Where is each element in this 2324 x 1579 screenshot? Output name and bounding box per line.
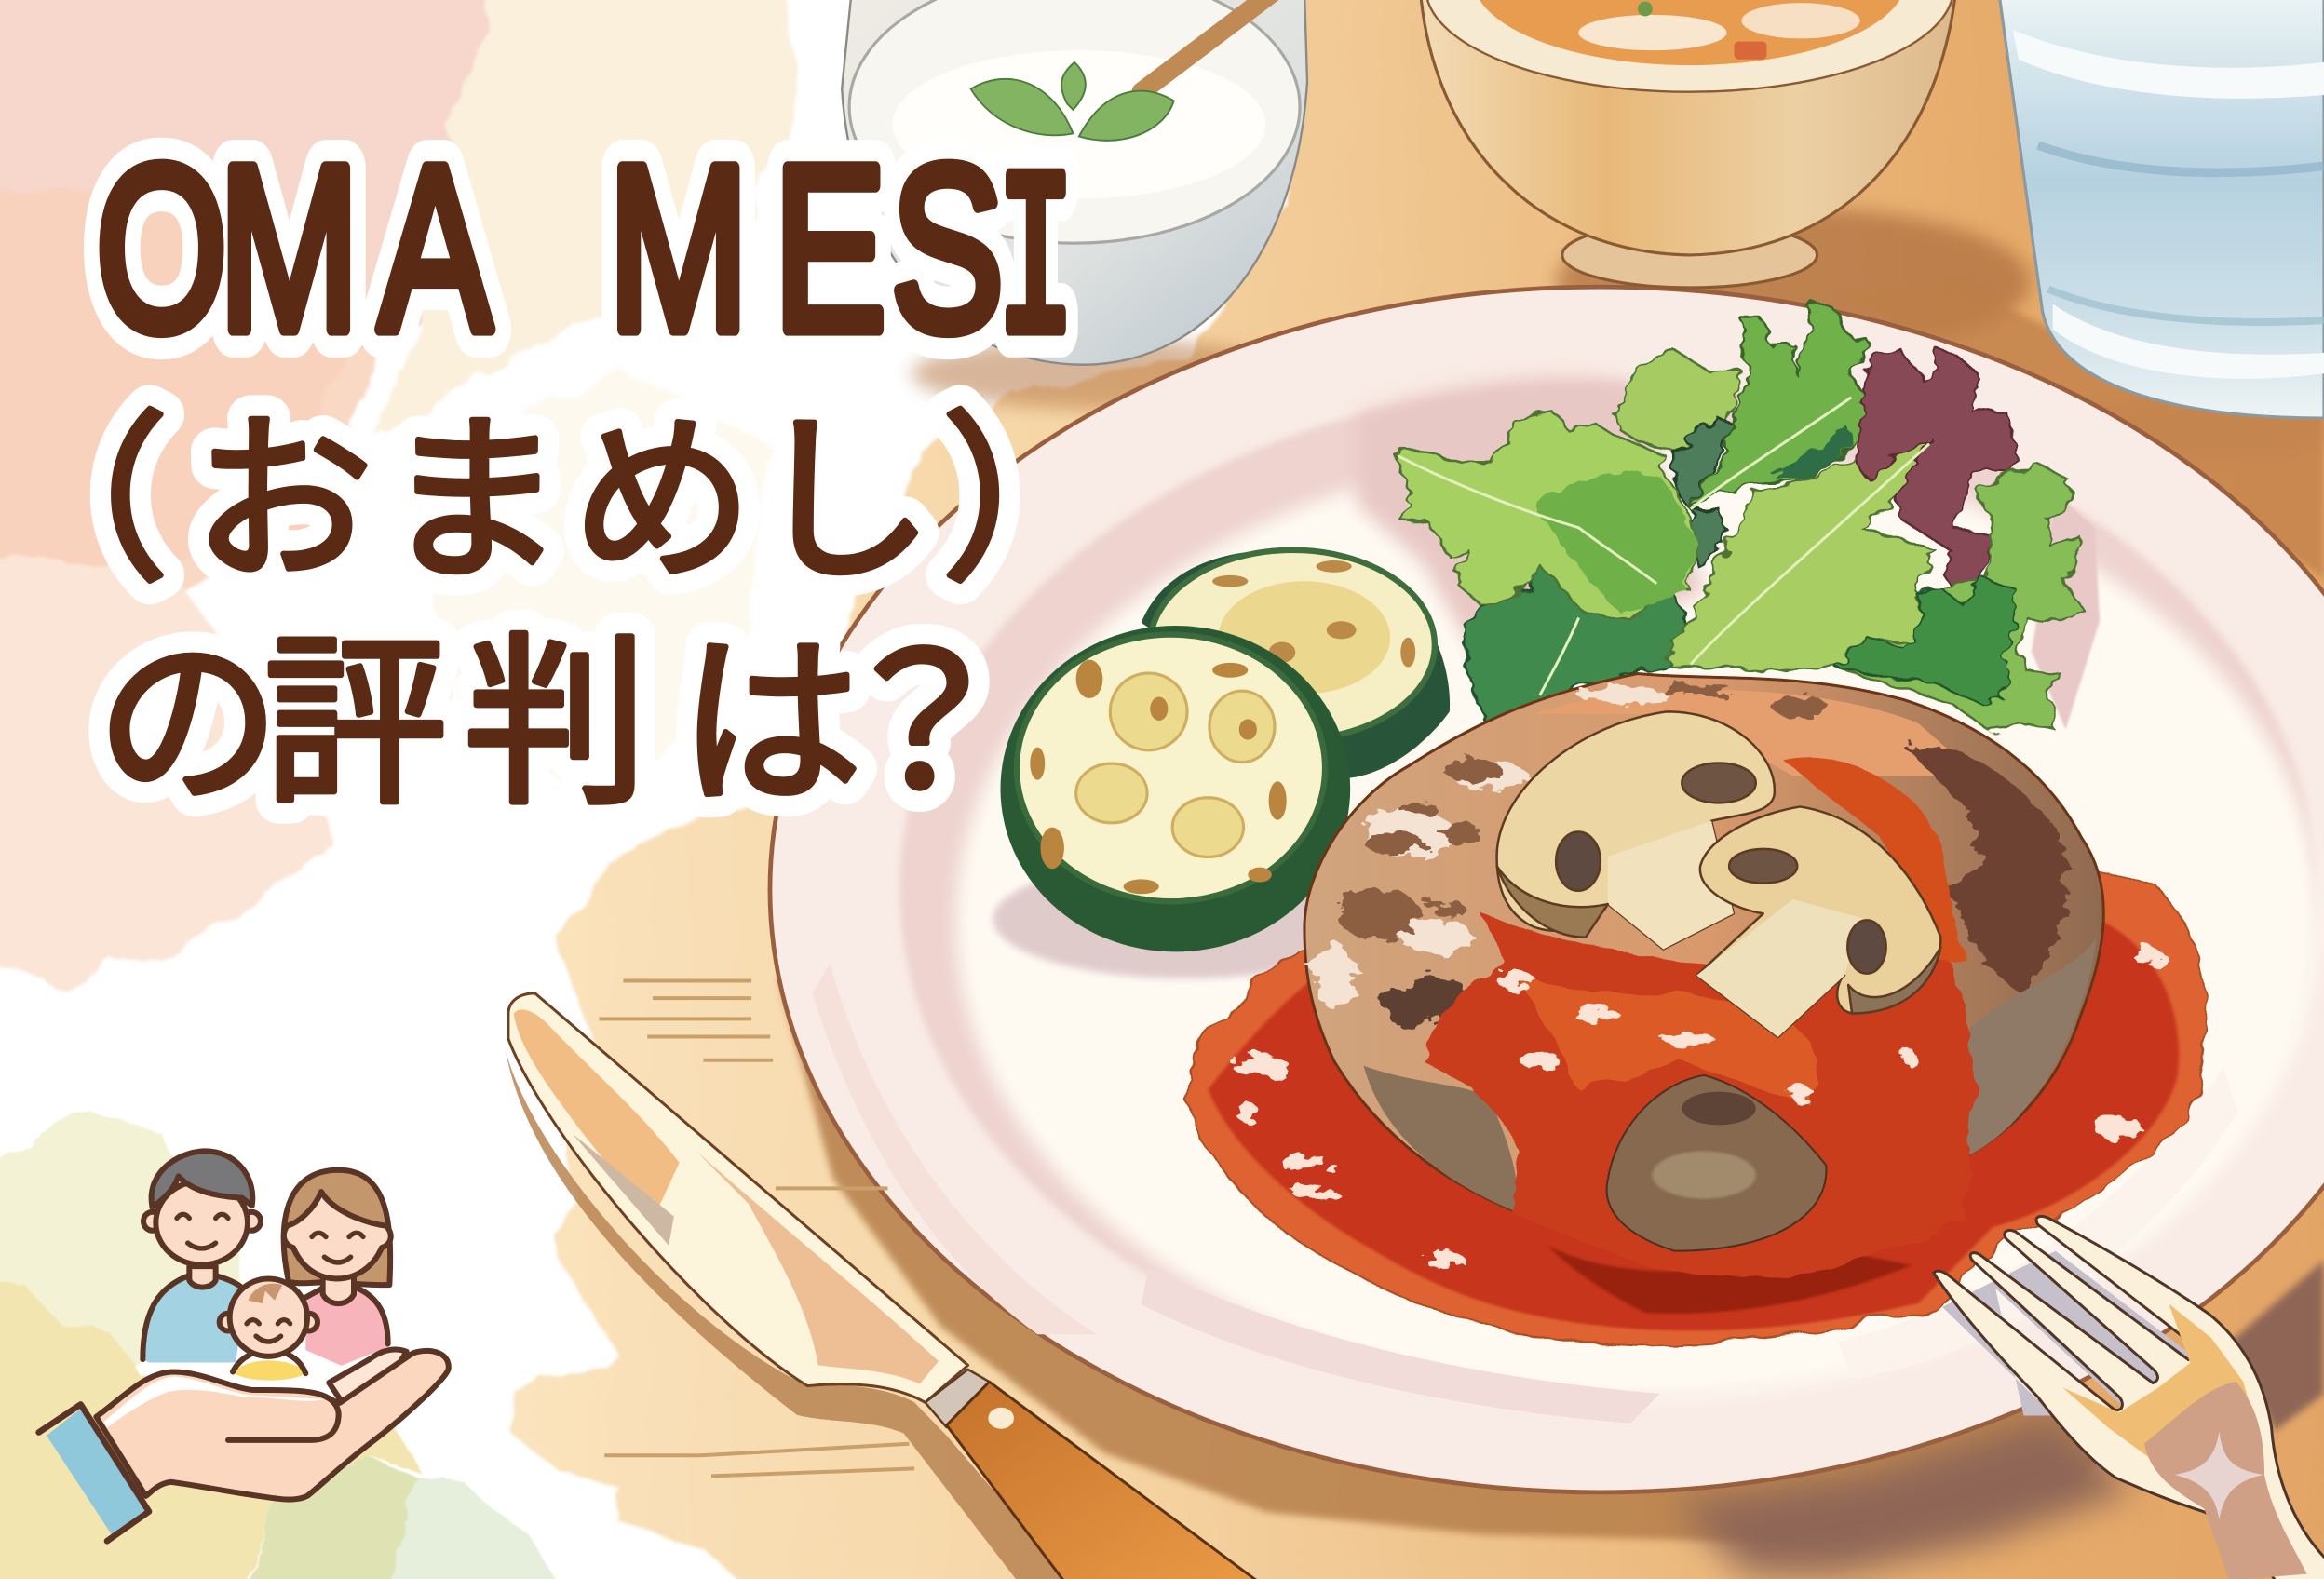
knife shadow [506, 1051, 1070, 1579]
icon: mint leaves [971, 62, 1174, 141]
knife [506, 981, 1267, 1579]
leaf: dark strip [1676, 416, 1735, 568]
tomato sauce [1186, 870, 2206, 1346]
icon: sparkle [2174, 1431, 2263, 1519]
zucchini: front slice [1000, 626, 1350, 951]
zucchini slices [1000, 550, 1450, 951]
steak speckles left [1313, 683, 1827, 1028]
title line 1: OMA MES [96, 118, 1004, 379]
shirt cuff [39, 1404, 149, 1541]
title line 1: I [996, 135, 1075, 400]
plate shadow through fork [1942, 1251, 2194, 1416]
zucchini: back slice [1142, 550, 1450, 778]
wood table [513, 0, 2324, 1579]
leaf: top light [1617, 347, 1739, 453]
plate shadow beside zucchini [993, 860, 1378, 978]
plate shadow behind lettuce [1357, 377, 1705, 668]
title line 2: （おまめし） [0, 400, 1122, 602]
bottom left wash [0, 1111, 568, 1579]
knife blade [508, 993, 968, 1402]
wood grain strokes [600, 981, 914, 1476]
hand [96, 1350, 449, 1500]
icon: spoon [1142, 0, 1275, 92]
title line 1: I [996, 135, 1075, 400]
yogurt bowl [842, 0, 1307, 365]
icon: family held in hand [0, 1111, 568, 1579]
lettuce [1394, 301, 2100, 730]
father [142, 1151, 261, 1362]
leaf veins [1398, 398, 1929, 695]
title line 3: の評判は？ [96, 621, 1014, 827]
leaf: center big [1667, 440, 1934, 670]
title line 3: の評判は？ [96, 621, 1014, 827]
sauce highlights [1234, 947, 2161, 1270]
leaf: right [1837, 463, 2085, 730]
title [0, 118, 1122, 827]
title line 2: （おまめし） [0, 400, 1122, 602]
table shadows [778, 208, 2324, 1574]
plate [768, 285, 2324, 1494]
leaf: purple [1857, 349, 2020, 608]
knife bolster [926, 1370, 990, 1427]
leaf: top centre [1691, 301, 1871, 509]
exposed meat lump [1607, 1075, 1826, 1251]
fork body [1934, 1216, 2324, 1579]
fork [1934, 1216, 2324, 1579]
mushroom: left [1497, 711, 1775, 950]
leaf: dark spinach [1464, 565, 1691, 726]
title line 1: OMA MES [96, 118, 1004, 379]
leaf: left light [1394, 412, 1696, 621]
soup bowl [1420, 0, 1956, 288]
steak dark right [1904, 745, 2067, 994]
baby [220, 1278, 318, 1381]
sauce over steak [1423, 759, 1972, 1279]
mother [284, 1170, 391, 1366]
hamburg steak with sauce [1186, 674, 2206, 1346]
knife handle [947, 1382, 1267, 1579]
water glass [1998, 0, 2324, 418]
lower left meat [1364, 1066, 1519, 1213]
steak body [1304, 674, 2103, 1213]
mushroom: right [1696, 806, 1940, 1037]
watercolor wash: top left pink and peach [0, 0, 793, 986]
